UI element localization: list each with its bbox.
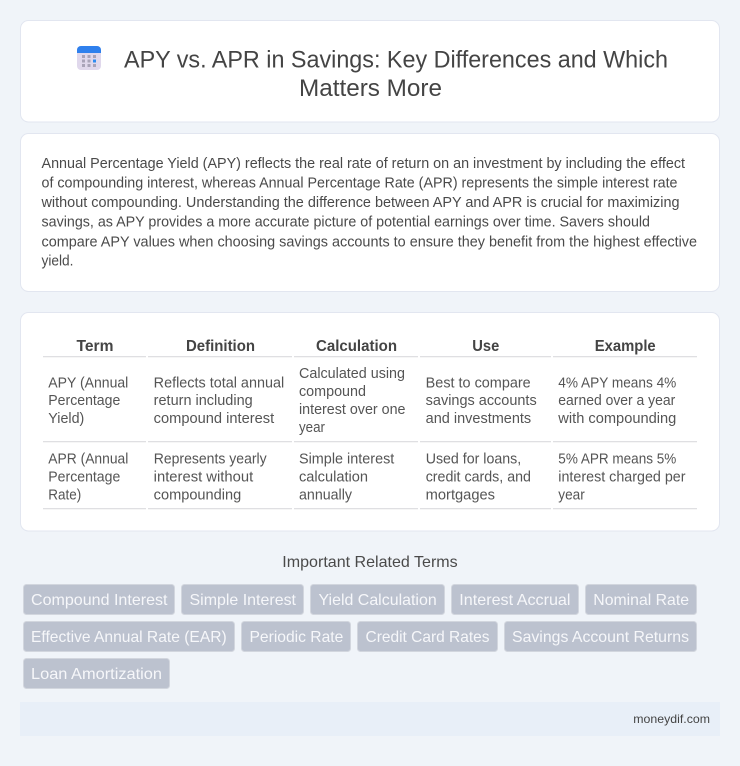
text block: description: compare APY values when choosing savings accounts to ensure they benefit from the highest effective [42, 234, 697, 250]
table row: APY: compound [299, 384, 366, 400]
tag: simple interest [182, 584, 304, 614]
tag: savings account returns [504, 622, 696, 652]
table row: APR: annually [299, 487, 353, 503]
table row: APR: 5% APR means 5% [558, 451, 676, 467]
table row: APY: Best to compare [426, 375, 531, 391]
table row: APY: and investments [426, 411, 531, 427]
title: APY vs. APR in Savings: Key Differences and Which [124, 46, 668, 74]
title: Matters More [299, 75, 442, 102]
table header row: Definition [186, 338, 255, 355]
tag: simple interest: Simple Interest [190, 592, 297, 609]
table row: APR: Represents yearly [154, 451, 267, 467]
table row: APY [43, 366, 697, 442]
table row: APR: credit cards, and [426, 469, 531, 485]
table row: APY: compound interest [154, 411, 274, 427]
table header row: Calculation [316, 338, 397, 355]
table row: APY: earned over a year [558, 393, 676, 409]
text block: description: yield. [42, 254, 74, 270]
icon: calendar [77, 46, 101, 70]
tag: savings account returns: Savings Account Returns [512, 629, 689, 646]
text block: description [40, 156, 697, 270]
table row: APY: 4% APY means 4% [558, 375, 676, 391]
tag: compound interest [24, 584, 174, 614]
table row: APY: year [299, 420, 325, 436]
table row: APR: Rate) [48, 487, 81, 503]
panel: description [20, 134, 720, 292]
table row: APR: year [558, 487, 585, 503]
panel: related term tags [24, 584, 696, 688]
footer [20, 702, 720, 736]
table row: APR: interest without [154, 469, 253, 485]
tag: effective annual rate [24, 622, 234, 652]
title [124, 46, 668, 102]
table row: APR: APR (Annual [48, 451, 128, 467]
table row: APY: Yield) [48, 411, 84, 427]
tag: interest accrual [452, 584, 578, 614]
table row: APY: Reflects total annual [154, 375, 284, 391]
table header row: Example [595, 338, 656, 355]
table row: APY: interest over one [299, 402, 406, 418]
tag: loan amortization [24, 658, 170, 688]
table row: APR: calculation [299, 469, 368, 485]
table row: APR: interest charged per [558, 469, 686, 485]
table row: APR: Used for loans, [426, 451, 521, 467]
tag: yield calculation [310, 584, 444, 614]
text block: description: without compounding. Understanding the difference between APY and APR is crucial for maximizing [40, 195, 680, 211]
tag: effective annual rate: Effective Annual Rate (EAR) [31, 629, 227, 646]
panel: comparison table [20, 312, 720, 531]
tag: nominal rate: Nominal Rate [593, 592, 689, 609]
tag: periodic rate [242, 622, 350, 652]
table row: APR: Percentage [48, 469, 120, 485]
table row: APY: savings accounts [426, 393, 537, 409]
tag: compound interest: Compound Interest [31, 592, 168, 609]
text block: description: savings, as APY provides a more accurate picture of potential earnings over time. Savers should [42, 215, 650, 231]
table row: APY: Percentage [48, 393, 120, 409]
table row: APR: compounding [154, 487, 241, 503]
tag: credit card rates [358, 622, 498, 652]
tag: interest accrual: Interest Accrual [459, 592, 570, 609]
heading: important related terms: Important Related Terms [282, 554, 458, 571]
table row: APY: Calculated using [299, 366, 405, 382]
text block: description: of compounding interest, whereas Annual Percentage Rate (APR) represents the simple interest rate [42, 176, 678, 192]
tag: loan amortization: Loan Amortization [31, 666, 162, 683]
table row: APR: mortgages [426, 487, 495, 503]
tag: periodic rate: Periodic Rate [250, 629, 343, 646]
table header row [43, 338, 697, 357]
table header row: Term [76, 338, 114, 355]
table row: APY: return including [154, 393, 253, 409]
table header row: Use [472, 338, 500, 355]
tag: yield calculation: Yield Calculation [318, 592, 437, 609]
text block: description: Annual Percentage Yield (APY) reflects the real rate of return on an investment by including the effect [42, 156, 685, 172]
footer: moneydif.com [633, 712, 710, 726]
tag: nominal rate [586, 584, 696, 614]
panel: title card [20, 20, 720, 122]
table row: APY: with compounding [557, 411, 676, 427]
table row: APR [43, 451, 697, 509]
tag: credit card rates: Credit Card Rates [366, 629, 490, 646]
table row: APR: Simple interest [299, 451, 394, 467]
table row: APY: APY (Annual [48, 375, 128, 391]
